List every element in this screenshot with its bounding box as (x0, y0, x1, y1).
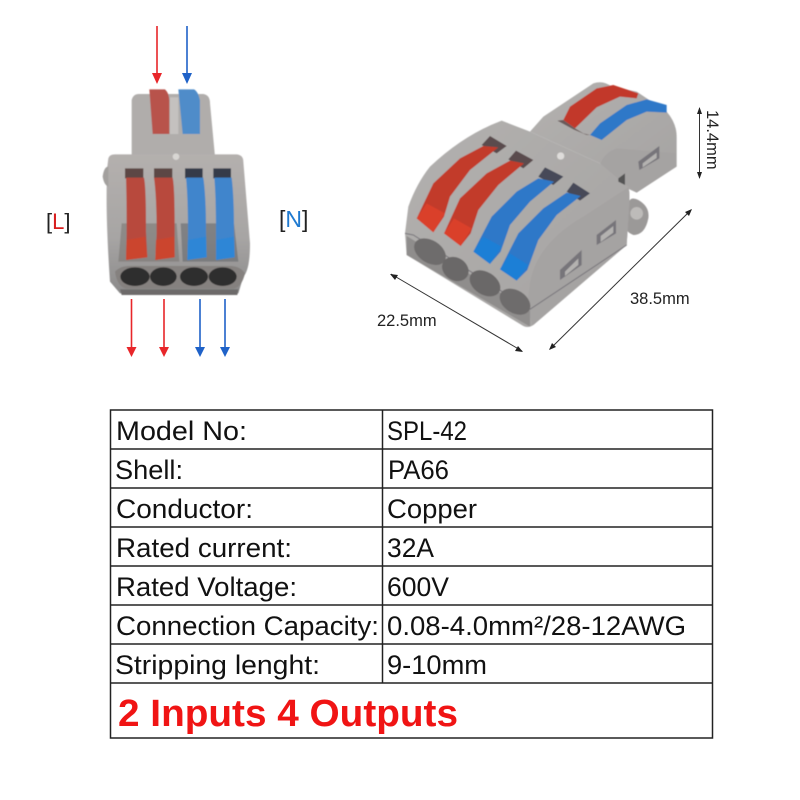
row: model (116, 416, 467, 446)
row: connection capacity (116, 611, 686, 641)
heading: inputs and outputs: 2 Inputs 4 Outputs (118, 693, 458, 735)
row: conductor: Conductor: (116, 494, 253, 524)
row: shell: Shell: (115, 455, 183, 485)
dimension: length 38.5mm (549, 209, 692, 350)
row: rated current: Rated current: (116, 533, 292, 563)
arrow: red input (152, 26, 162, 84)
row: shell: PA66 (388, 455, 449, 485)
arrow: blue output 1 (195, 299, 205, 357)
right connector: perspective view (405, 82, 677, 327)
label: neutral: [N] (279, 206, 308, 232)
label: live: [L] (46, 209, 70, 234)
row: model: Model No: (116, 416, 247, 446)
row: rated voltage (116, 572, 449, 602)
dimension: height 14.4mm (697, 107, 721, 179)
row: rated voltage: Rated Voltage: (116, 572, 297, 602)
row: rated current (116, 533, 434, 563)
row: conductor: Copper (387, 494, 477, 524)
row: connection capacity: 0.08-4.0mm²/28-12AWG (387, 611, 686, 641)
arrow: blue output 2 (220, 299, 230, 357)
row: stripping length: Stripping lenght: (115, 650, 320, 680)
row: model: SPL-42 (387, 416, 467, 446)
left connector: front view (103, 89, 250, 295)
arrow: blue input (182, 26, 192, 84)
row: connection capacity: Connection Capacity: (116, 611, 379, 641)
row: shell (115, 455, 449, 485)
dimension: length 38.5mm: 38.5mm (630, 290, 690, 308)
dimension: width 22.5mm (377, 274, 523, 352)
row: rated voltage: 600V (387, 572, 449, 602)
row: stripping length: 9-10mm (387, 650, 487, 680)
specification table (110, 410, 712, 738)
arrow: red output 2 (159, 299, 169, 357)
table grid (110, 410, 712, 738)
dimension: height 14.4mm: 14.4mm (703, 110, 721, 170)
row: conductor (116, 494, 477, 524)
dimension: width 22.5mm: 22.5mm (377, 312, 437, 330)
row: rated current: 32A (387, 533, 434, 563)
arrow: red output 1 (126, 299, 136, 357)
row: stripping length (115, 650, 487, 680)
